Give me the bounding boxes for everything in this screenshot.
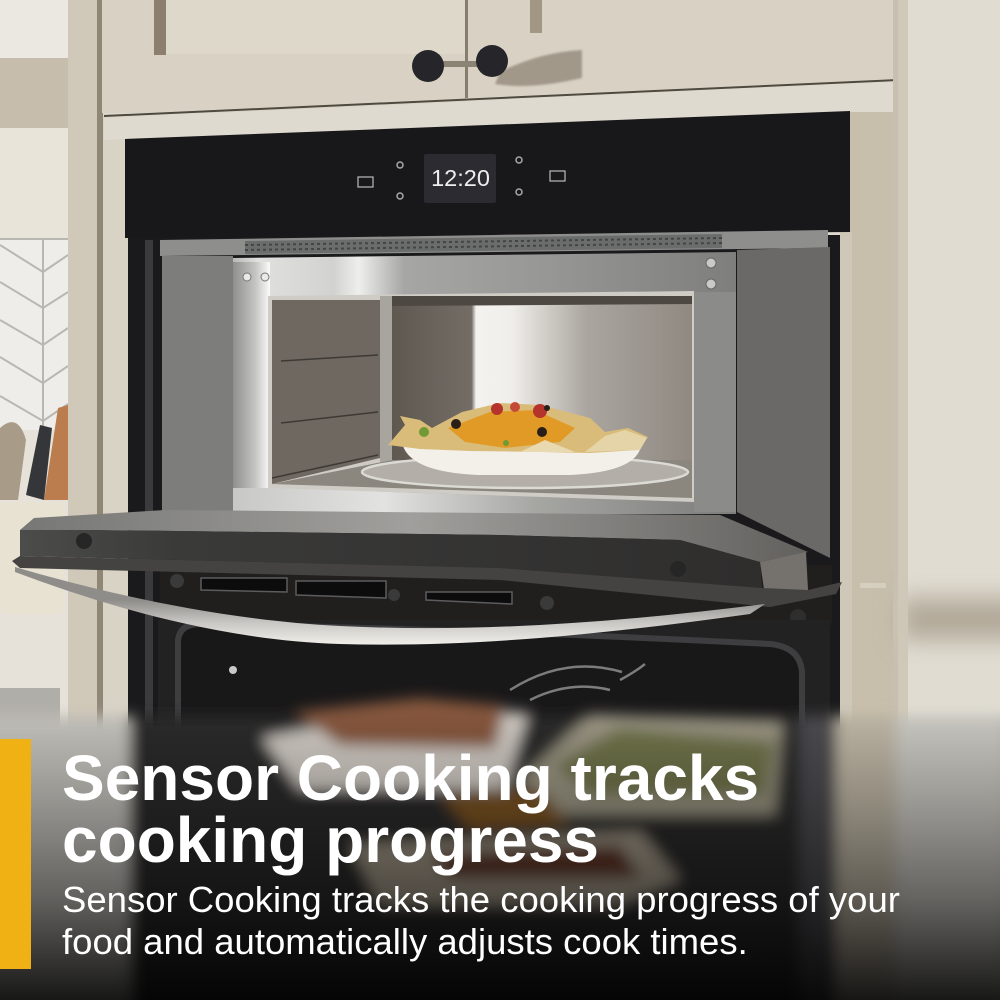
utensil crock (0, 405, 68, 614)
right wall panel (893, 0, 1000, 732)
display (424, 154, 496, 203)
oven icon (550, 171, 565, 181)
touch buttons (397, 157, 522, 199)
body text: food and automatically adjusts cook times. (62, 921, 748, 962)
vent strip (160, 230, 828, 256)
title: Sensor Cooking tracks (62, 742, 759, 814)
lower hardware band (160, 565, 832, 625)
body text (62, 879, 900, 962)
title: cooking progress (62, 804, 599, 876)
upper cabinet doors (102, 0, 898, 113)
lower oven (158, 620, 830, 735)
control panel: 12:20 (431, 165, 490, 191)
nachos (388, 402, 648, 453)
microwave stainless frame (233, 252, 736, 514)
backsplash tile (0, 238, 68, 438)
left wall bands (0, 0, 68, 238)
cabinet knobs (412, 45, 508, 82)
blurred bottom band (0, 698, 1000, 1000)
caption shade (0, 710, 1000, 1000)
oven body (128, 235, 840, 735)
door handle (15, 567, 765, 645)
plate (403, 446, 641, 475)
microwave cavity (268, 291, 694, 502)
body text: Sensor Cooking tracks the cooking progress of your (62, 879, 900, 920)
counter (0, 430, 68, 730)
microwave side panels (162, 247, 830, 558)
accent bar (0, 739, 31, 969)
cabinet frame strip (104, 82, 898, 140)
right column (840, 0, 908, 732)
turntable (362, 456, 688, 488)
control panel (125, 111, 850, 238)
cabinet gap line (104, 80, 898, 116)
left cabinet column (68, 0, 129, 730)
microwave icon (358, 177, 373, 187)
title (62, 742, 759, 876)
door slots (201, 578, 512, 604)
knob shadow (495, 50, 582, 86)
microwave door (12, 510, 842, 607)
